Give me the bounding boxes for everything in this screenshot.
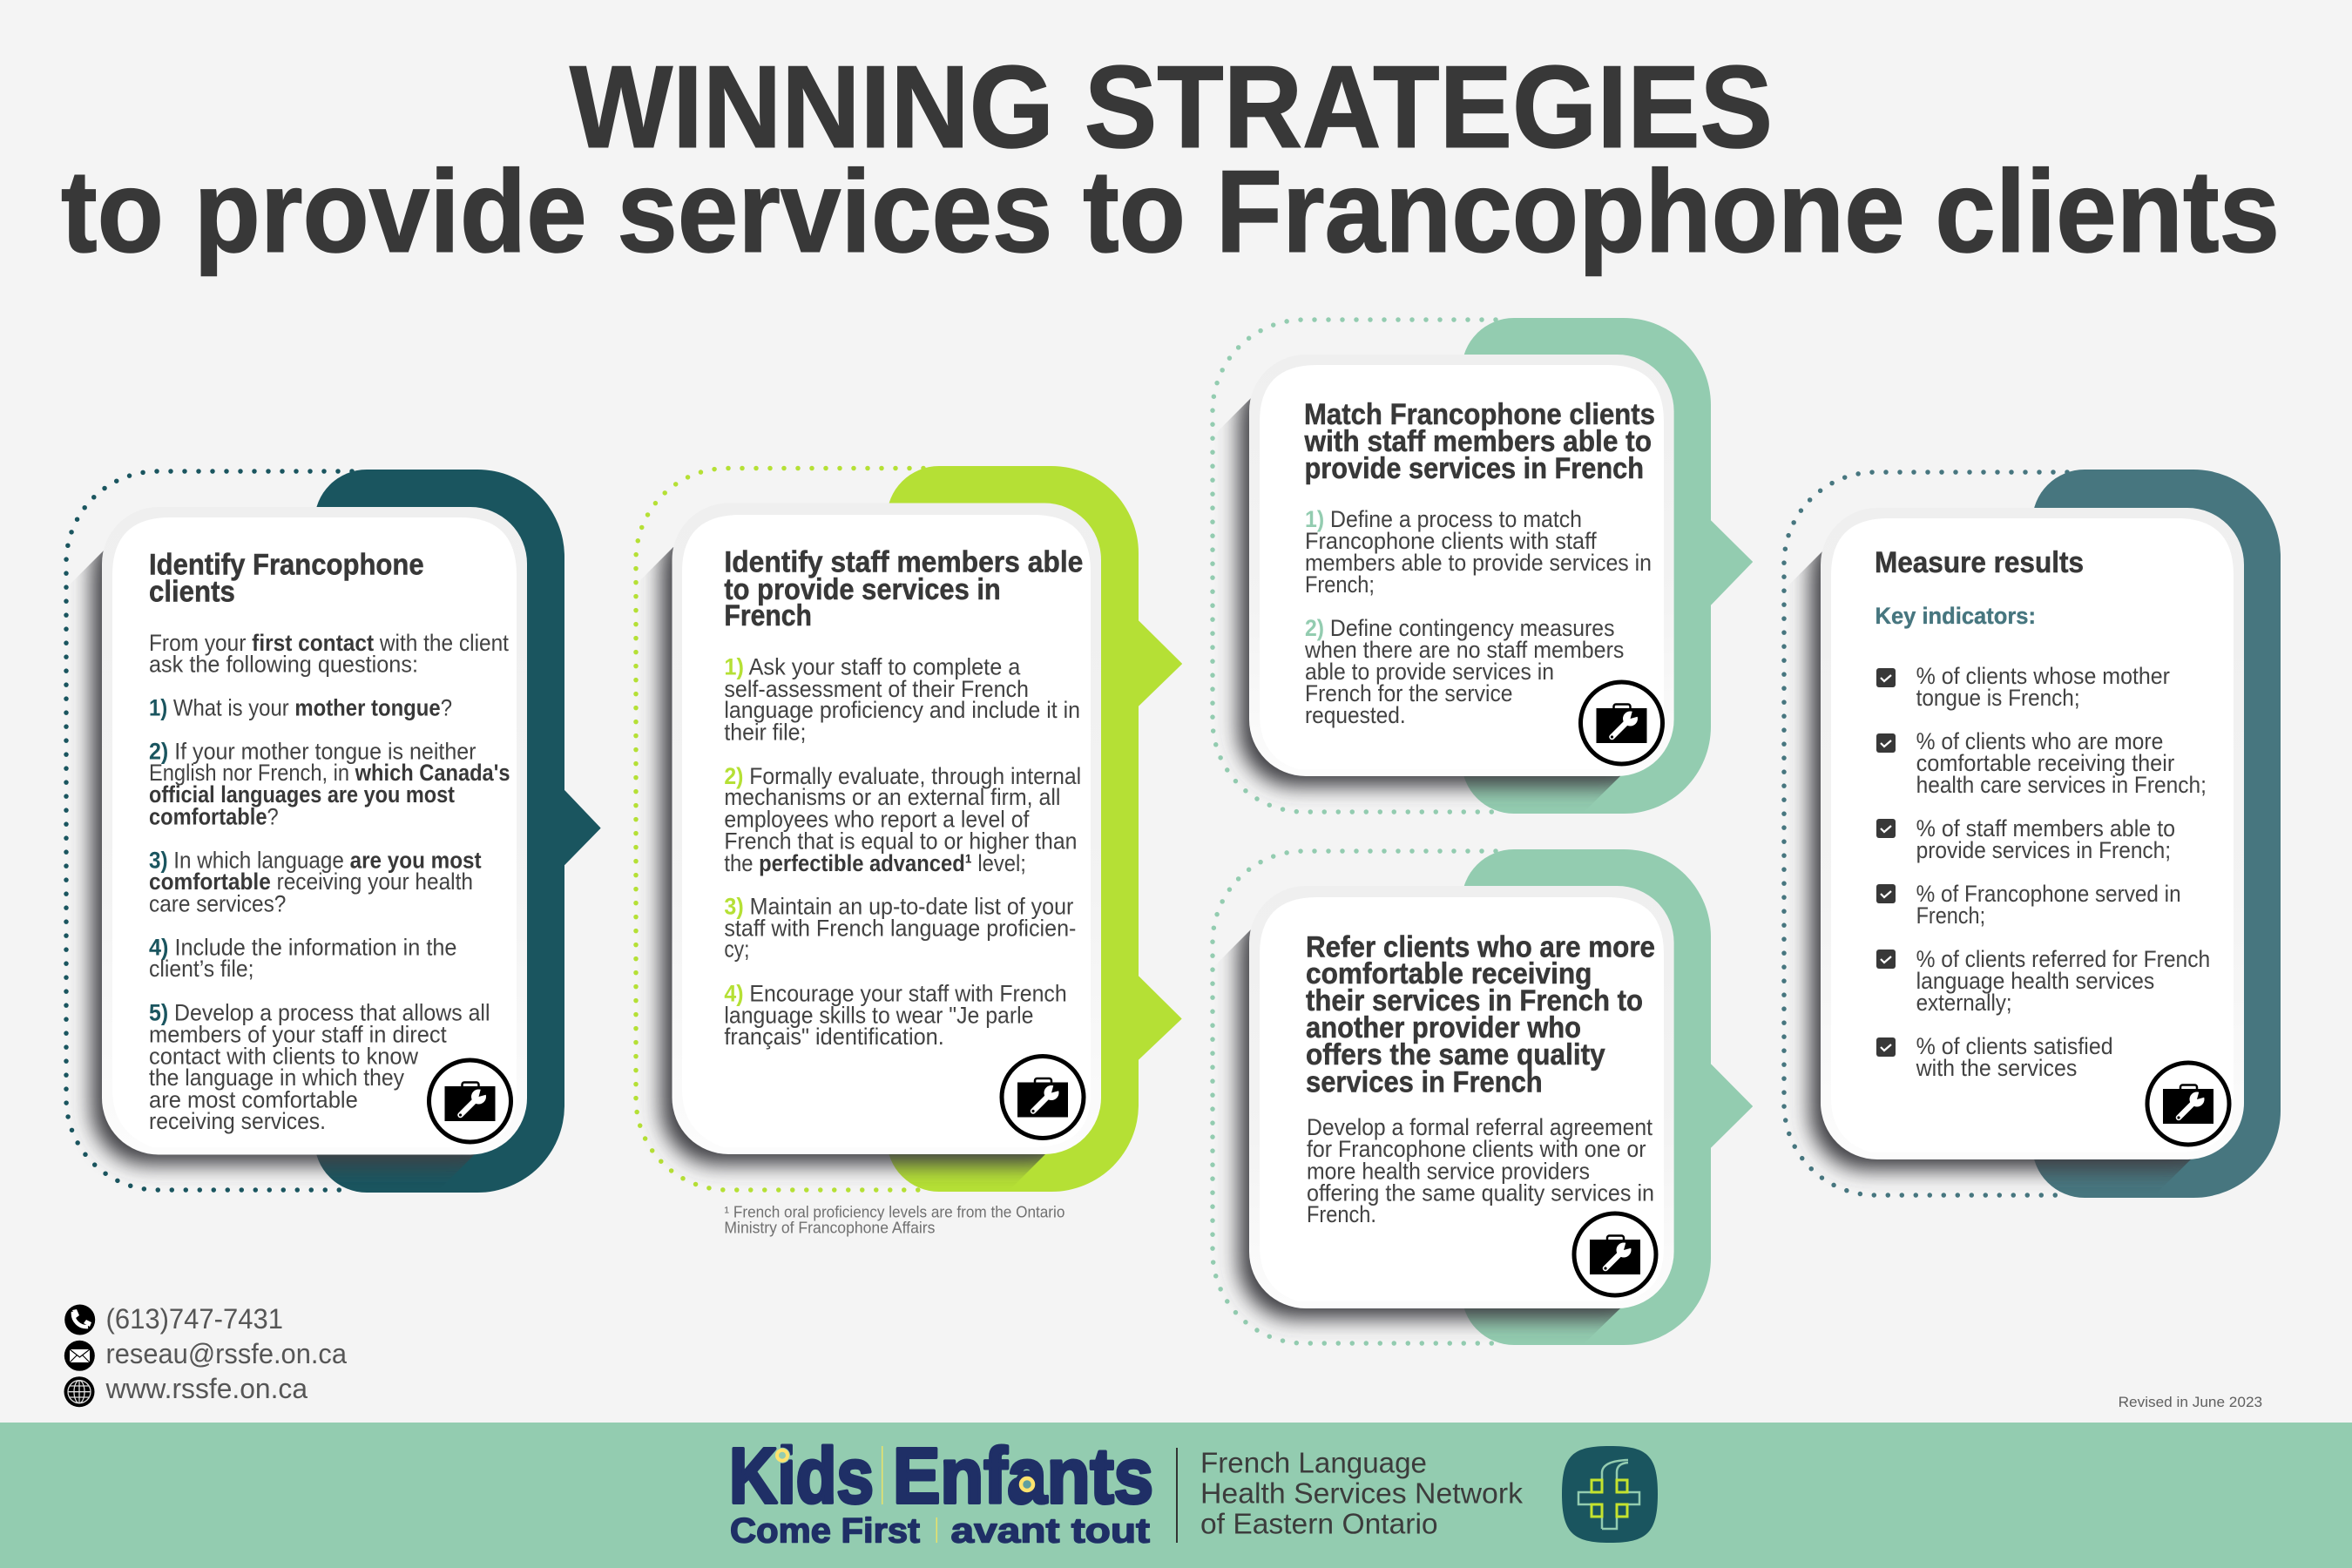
arrow <box>1704 521 1753 605</box>
heading: services in French <box>1306 1065 1543 1098</box>
body text: self-assessment of their French <box>724 676 1029 702</box>
body text: French. <box>1307 1201 1376 1227</box>
icon: toolbox <box>1002 1056 1084 1138</box>
dotted outline <box>1213 320 1496 812</box>
body text: ask the following questions: <box>149 652 418 678</box>
indicators checklist: % of clients referred for French <box>1916 946 2210 972</box>
organisation name <box>1200 1447 1524 1540</box>
checkboxes <box>1876 668 1896 1057</box>
footnote: ¹ French oral proficiency levels are from the Ontario <box>724 1203 1064 1220</box>
card shadow <box>1810 517 2234 1170</box>
card shadow <box>1239 895 1664 1319</box>
coloured backing shape <box>1462 318 1711 814</box>
card shadow <box>661 512 1088 1165</box>
logo: Kids Come First: Kids <box>729 1433 874 1520</box>
indicators checklist: French; <box>1916 902 1985 929</box>
dotted outline <box>66 471 352 1190</box>
body text: 1) Define a process to match <box>1305 506 1582 532</box>
indicators checklist: % of clients whose mother <box>1916 663 2170 689</box>
body text: comfortable? <box>149 804 279 830</box>
body text: cy; <box>724 936 749 963</box>
phone number: (613)747-7431 <box>106 1303 283 1335</box>
email: reseau@rssfe.on.ca <box>106 1338 347 1369</box>
body text: able to provide services in <box>1305 659 1554 685</box>
body text: 2) If your mother tongue is neither <box>149 738 476 764</box>
card shadow <box>1239 363 1664 787</box>
dotted outline <box>1213 851 1496 1343</box>
body text: 4) Encourage your staff with French <box>724 981 1067 1007</box>
body text: language proficiency and include it in <box>724 697 1080 723</box>
heading: Identify Francophone <box>149 549 424 582</box>
panel: refer clients <box>1213 849 1753 1345</box>
card <box>102 507 527 1155</box>
indicators checklist: language health services <box>1916 968 2154 994</box>
body text: contact with clients to know <box>149 1044 418 1070</box>
icon: toolbox <box>1574 1213 1656 1295</box>
body text <box>1307 1114 1654 1227</box>
panel: identify staff members <box>636 466 1181 1237</box>
heading <box>1306 930 1655 1098</box>
body text: Develop a formal referral agreement <box>1307 1114 1652 1140</box>
logo: Kids Come First: Enfants <box>893 1433 1153 1520</box>
indicators checklist: with the services <box>1916 1055 2077 1081</box>
footnote: Ministry of Francophone Affairs <box>724 1220 935 1237</box>
subheading: Key indicators: <box>1875 603 2036 629</box>
panel: match clients with staff <box>1213 318 1753 814</box>
body text: comfortable receiving your health <box>149 868 473 895</box>
indicators checklist: health care services in French; <box>1916 772 2207 798</box>
heading: Refer clients who are more <box>1306 930 1655 963</box>
arrows <box>1132 621 1181 1059</box>
card <box>1821 508 2244 1159</box>
body text: requested. <box>1305 702 1406 728</box>
body text: receiving services. <box>149 1108 326 1134</box>
logo: network <box>1562 1446 1658 1543</box>
body text: 2) Define contingency measures <box>1305 615 1615 641</box>
body text: mechanisms or an external firm, all <box>724 784 1060 810</box>
body text <box>724 653 1081 1050</box>
body text <box>1304 506 1652 728</box>
heading: their services in French to <box>1306 984 1643 1017</box>
logo: Kids Come First: Come First <box>730 1512 920 1551</box>
body text: more health service providers <box>1307 1158 1590 1184</box>
heading: with staff members able to <box>1304 425 1652 458</box>
body text: 2) Formally evaluate, through internal <box>724 763 1081 789</box>
heading <box>1304 398 1655 485</box>
indicators checklist: % of clients satisfied <box>1916 1033 2113 1059</box>
body text: for Francophone clients with one or <box>1307 1136 1646 1162</box>
body text: language skills to wear "Je parle <box>724 1002 1033 1028</box>
indicators checklist: % of Francophone served in <box>1916 881 2181 907</box>
card <box>1249 886 1674 1308</box>
coloured backing shape <box>887 466 1139 1192</box>
body text: Francophone clients with staff <box>1305 528 1597 554</box>
body text: 1) Ask your staff to complete a <box>724 653 1021 679</box>
body text: French; <box>1305 571 1375 598</box>
body text: 3) In which language are you most <box>149 848 482 874</box>
body text <box>149 630 510 1134</box>
panel: identify Francophone clients <box>66 470 600 1193</box>
icon: globe <box>64 1376 94 1407</box>
revision note: Revised in June 2023 <box>2119 1394 2262 1410</box>
contact details <box>64 1303 347 1407</box>
website: www.rssfe.on.ca <box>105 1373 308 1404</box>
organisation name: of Eastern Ontario <box>1200 1508 1438 1540</box>
heading: to provide services in <box>724 573 1001 606</box>
coloured backing shape <box>2032 470 2281 1198</box>
body text: their file; <box>724 720 806 746</box>
icon: envelope <box>64 1341 95 1371</box>
icon: phone <box>64 1305 95 1335</box>
title <box>61 43 2280 277</box>
arrow <box>558 791 600 864</box>
icon: toolbox <box>2147 1063 2229 1145</box>
dotted outline <box>1784 472 2067 1195</box>
card shadow <box>91 516 517 1165</box>
heading: provide services in French <box>1305 452 1644 485</box>
panel: measure results <box>1784 470 2281 1198</box>
heading: clients <box>149 576 235 609</box>
heading <box>724 545 1083 632</box>
body text: members of your staff in direct <box>149 1021 447 1047</box>
body text: the perfectible advanced¹ level; <box>724 850 1026 876</box>
body text: 4) Include the information in the <box>149 934 456 960</box>
body text: French that is equal to or higher than <box>724 828 1077 854</box>
body text: staff with French language proficien- <box>724 915 1076 941</box>
body text: when there are no staff members <box>1304 637 1624 663</box>
body text: are most comfortable <box>149 1087 358 1113</box>
body text: the language in which they <box>149 1064 404 1091</box>
body text: From your first contact with the client <box>149 630 509 656</box>
body text: client’s file; <box>149 956 254 982</box>
heading: offers the same quality <box>1306 1038 1605 1071</box>
heading: comfortable receiving <box>1306 957 1592 990</box>
body text: 3) Maintain an up-to-date list of your <box>724 894 1073 920</box>
body text: 1) What is your mother tongue? <box>149 695 452 721</box>
heading: French <box>724 599 812 632</box>
indicators checklist: tongue is French; <box>1916 685 2080 711</box>
icon: toolbox <box>1580 682 1662 764</box>
indicators checklist: % of staff members able to <box>1916 815 2175 841</box>
coloured backing shape <box>314 470 564 1193</box>
card <box>672 504 1101 1154</box>
coloured backing shape <box>1462 849 1711 1345</box>
body text: offering the same quality services in <box>1307 1179 1654 1206</box>
card <box>1249 355 1674 776</box>
body text: employees who report a level of <box>724 807 1030 833</box>
heading: Identify staff members able <box>724 545 1083 578</box>
logo: Kids Come First <box>729 1433 1153 1551</box>
footnote <box>724 1203 1064 1237</box>
dotted outline <box>636 469 923 1190</box>
heading <box>149 549 424 609</box>
body text: members able to provide services in <box>1305 550 1652 576</box>
indicators checklist: externally; <box>1916 990 2012 1016</box>
icon: toolbox <box>429 1060 510 1142</box>
arrow <box>1704 1064 1753 1147</box>
body text: care services? <box>149 890 286 916</box>
divider <box>1176 1448 1178 1543</box>
heading: Match Francophone clients <box>1304 398 1655 431</box>
heading: another provider who <box>1306 1011 1581 1044</box>
body text: official languages are you most <box>149 781 455 808</box>
logo: Kids Come First: avant tout <box>951 1512 1150 1551</box>
body text: English nor French, in which Canada's <box>149 760 510 786</box>
indicators checklist: % of clients who are more <box>1916 728 2163 754</box>
title: WINNING STRATEGIES <box>570 43 1773 172</box>
organisation name: French Language <box>1200 1447 1427 1479</box>
body text: 5) Develop a process that allows all <box>149 1000 490 1026</box>
indicators checklist: comfortable receiving their <box>1916 750 2174 776</box>
indicators checklist <box>1876 663 2210 1081</box>
body text: French for the service <box>1305 680 1512 706</box>
indicators checklist: provide services in French; <box>1916 837 2171 863</box>
heading: Measure results <box>1875 546 2084 579</box>
footer band <box>0 1423 2352 1568</box>
organisation name: Health Services Network <box>1200 1477 1524 1510</box>
body text: français" identification. <box>724 1024 944 1050</box>
